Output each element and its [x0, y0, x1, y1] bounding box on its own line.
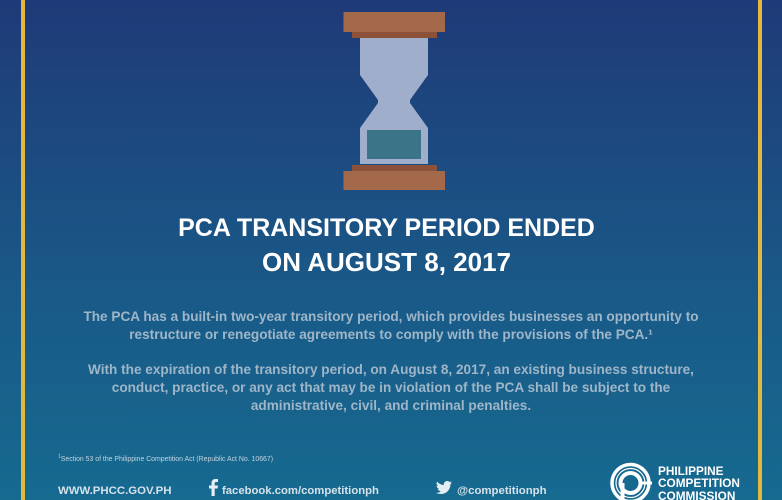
website link: WWW.PHCC.GOV.PH	[58, 485, 172, 497]
icon: hourglass	[344, 12, 445, 190]
right gold border line	[758, 0, 762, 500]
paragraph: transitory period	[83, 309, 699, 342]
title	[178, 214, 595, 276]
title: ON AUGUST 8, 2017	[262, 246, 511, 276]
logo wordmark: PHILIPPINE	[658, 464, 724, 478]
paragraph: expiration: conduct, practice, or any act that may be in violation of the PCA shall be subject to the	[112, 380, 670, 395]
logo wordmark: COMPETITION	[658, 476, 740, 490]
paragraph: expiration	[88, 362, 694, 413]
footnote: 1Section 53 of the Philippine Competition Act (Republic Act No. 10667)	[58, 454, 273, 463]
paragraph: transitory period: restructure or renegotiate agreements to comply with the provisions of the PCA.¹	[129, 327, 653, 342]
left gold border line	[21, 0, 25, 500]
twitter handle: @competitionph	[457, 485, 547, 497]
paragraph: expiration: administrative, civil, and criminal penalties.	[251, 398, 531, 413]
facebook handle: facebook.com/competitionph	[222, 485, 379, 497]
icon: facebook	[209, 479, 218, 496]
logo mark	[610, 462, 652, 500]
logo wordmark	[658, 464, 740, 500]
paragraph: transitory period: The PCA has a built-in two-year transitory period, which provides businesses an opportunity to	[83, 309, 699, 324]
paragraph: expiration: With the expiration of the transitory period, on August 8, 2017, an existing business structure,	[88, 362, 694, 377]
icon: twitter	[436, 481, 452, 494]
title: PCA TRANSITORY PERIOD ENDED	[178, 214, 595, 242]
logo: Philippine Competition Commission	[610, 462, 740, 500]
